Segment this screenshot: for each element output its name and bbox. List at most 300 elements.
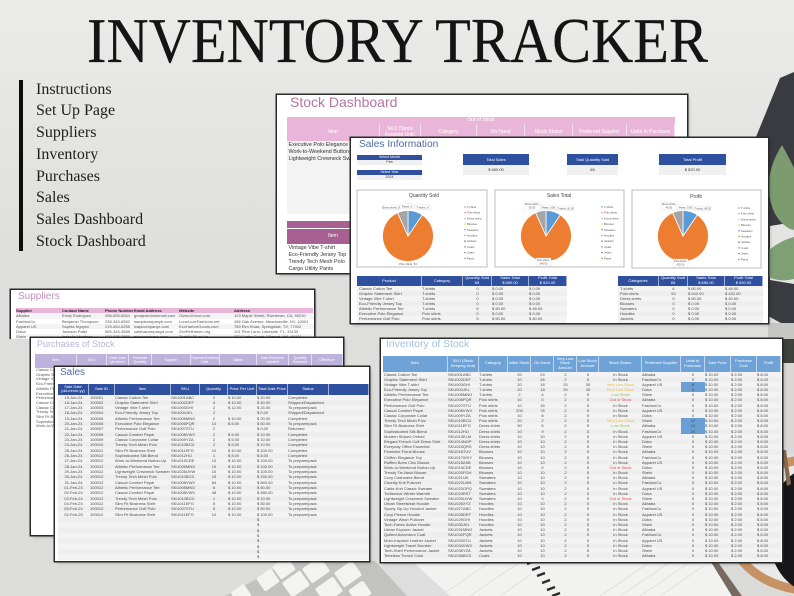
suppliers table: 456 Oak Avenue, Meadowville, NY, 10001 [234,319,308,324]
second table header [287,229,675,244]
inventory table rows: SKU016TUV [448,449,471,454]
kpi: total sales: Total Sales [486,157,506,162]
categories table rows: Polo shirts [620,291,639,296]
sales table rows: 2 [213,394,215,400]
sales table rows: $ 10.00 [257,442,270,447]
inventory table rows: $ 10.00 [705,413,718,418]
sales table header: SKU [181,386,189,391]
purchases table rows: Performance Golf [36,395,67,400]
inventory table rows: Apparel US [642,408,662,413]
sales table rows: Returned [288,426,304,431]
inventory table rows: In Stock [613,429,628,434]
inventory table rows: SKU001ABC [448,372,471,376]
inventory table rows: 5 [587,449,589,454]
inventory table rows: $ 10.00 [705,496,718,501]
inventory table rows: Apparel US [642,460,662,465]
sales table rows: To prepare/pack [288,490,317,495]
inventory table rows: 2 [564,501,567,506]
product table rows: Polo shirts [422,316,441,321]
sales table rows: 10 [212,469,216,474]
inventory table rows: 5 [587,413,589,418]
categories table rows: Hoodies [620,311,635,316]
categories table rows: 0 [672,311,675,316]
inventory table rows: Classic Cotton Tee [384,372,417,376]
chart: quantity sold: Dress shirts [467,216,482,220]
inventory table rows: $ 8.00 [757,423,768,428]
inventory table rows: 5 [587,512,589,517]
inventory table rows: Urban Streetwear Hoodie [384,501,429,506]
sales table rows: Slim Fit Business Shirt [115,512,155,517]
purchases table header: Difference [319,358,335,362]
sales table rows: 1 [213,453,215,458]
inventory table rows: 10 [517,397,522,402]
sales table rows: Completed [288,432,307,437]
inventory table rows: $ 10.00 [705,548,718,553]
inventory table rows: 5 [587,434,589,439]
sales table rows: 100012 [90,485,103,490]
inventory table rows: Timeless Trench Coat [384,553,423,558]
inventory table rows: SKU002DEF [448,377,471,382]
categories table rows: $ 0.00 [688,301,699,306]
chart: sales total: Hoodies [604,234,615,238]
inventory table rows: 10 [517,460,522,465]
product table rows: T-shirts [422,301,435,306]
categories table header: $ 520.00 [736,280,751,285]
chart: sales total: Blouses [604,222,615,226]
inventory table rows: 0 [541,397,544,402]
inventory table rows: Alibaba [642,475,655,480]
chart: profit: Pants, 0.00 [679,205,693,209]
inventory table rows: Shein [642,522,652,527]
chart: quantity sold: T-shirts [467,205,477,209]
sales table rows: 23-Jan-24 [64,437,82,442]
inventory table rows: 2 [564,548,567,553]
inventory table rows: SKU009YZA [448,413,471,418]
sales table header: Sale ID [95,386,108,391]
inventory table rows: T-shirts [479,392,492,397]
inventory table rows: Performance Golf Polo [384,403,424,408]
inventory table rows: $ 10.00 [705,517,718,522]
inventory table header: SKU (Stock Keeping Unit) [451,358,475,368]
panel: inventory of stock [381,339,782,562]
categories table rows: Sweaters [620,306,637,311]
kpi: total sales: $ 650.00 [488,167,504,172]
purchases table header: Status [233,358,243,362]
sales table rows: To prepare/pack [288,480,317,485]
inventory table rows: 0 [692,408,694,413]
sales table rows: SKU002DEF [171,400,194,405]
product table header: Category [434,278,450,283]
inventory table rows: In Stock [613,486,628,491]
inventory table rows: Very Low Stock [607,418,634,423]
sales table rows: To prepare/pack [288,458,317,463]
sales table rows: To prepare/pack [288,421,317,426]
inventory table rows: $ 2.00 [731,377,742,382]
inventory table rows: $ 8.00 [757,429,768,434]
inventory table rows: 5 [587,517,589,522]
sales table rows: SKU011EFG [171,512,194,517]
inventory table rows: FashionCo [642,532,661,537]
inventory table rows: Hoodies [479,501,494,506]
sales table rows: 100001 [90,394,103,400]
inventory table rows: 5 [587,372,589,376]
sales table rows: Executive Polo Elegance [115,421,159,426]
inventory table rows: $ 10.00 [705,429,718,434]
categories table rows: $ 0.00 [725,301,736,306]
purchases table rows: Classic Corporate [36,405,68,410]
inventory table rows: SKU021IJK [448,475,469,480]
sales table rows: $ 100.00 [257,512,273,517]
inventory table rows: 0 [692,532,694,537]
inventory table header: Sale Price [708,360,727,365]
inventory table rows: 30 [586,382,590,387]
sales table rows: 100012 [90,458,103,463]
inventory table rows: Out of Stock [609,397,632,402]
chart: profit: T-shirts, 48.00 [694,206,711,210]
inventory table rows: Out of Stock [609,496,632,501]
chart: quantity sold: Polo shirts, 54 [399,262,417,266]
categories table rows: 0 [672,316,675,321]
inventory table rows: Polo shirts [479,413,498,418]
out of stock table header [287,124,675,141]
inventory table rows: $ 10.00 [705,439,718,444]
sales table rows: Athletic Performance Tee [115,485,160,490]
inventory table rows: 10 [540,501,545,506]
inventory table rows: 0 [692,527,694,532]
inventory table rows: $ 8.00 [757,532,768,537]
inventory table rows: In Stock [613,501,628,506]
inventory table rows: Hoodies [479,517,494,522]
inventory table rows: 20 [563,387,568,392]
inventory table rows: Modern Striped Oxford [384,434,424,439]
sales table rows: $ 20.00 [257,416,270,421]
inventory table rows: 5 [587,377,589,382]
inventory table rows: Cozy Cashmere Blend [384,475,424,480]
inventory table rows: SKU014NOP [448,439,472,444]
chart: profit [632,190,761,268]
inventory table rows: In Stock [613,553,628,558]
inventory table rows: 20 [691,429,695,434]
inventory table rows: SKU015QRS [448,444,472,449]
inventory table rows: 10 [517,480,522,485]
sales table rows: $ 0.00 [257,410,268,415]
inventory table rows: 2 [564,423,567,428]
product table rows: 0 [476,291,479,296]
inventory table header: Initial Stock [509,360,529,365]
inventory table rows: $ 8.00 [757,434,768,439]
sales table rows: SKU005MNO [171,464,195,469]
inventory table rows: 5 [587,408,589,413]
inventory table rows: In Stock [613,522,628,527]
inventory table rows: 10 [517,496,522,501]
inventory table rows: Executive Polo Elegance [384,397,428,402]
inventory table rows: 10 [517,543,522,548]
suppliers table: 215-454-5255 [105,324,130,329]
kpi: total quantity sold [567,154,618,175]
inventory table rows: Polo shirts [479,397,498,402]
suppliers table: 101 Pine Lane, Lakeside, FL, 33139 [234,329,298,334]
sales table rows: $ [257,544,259,549]
inventory table rows: $ 2.00 [731,480,742,485]
inventory table rows: 0 [692,543,694,548]
inventory table rows: 2 [564,434,567,439]
inventory table rows: 2 [564,413,567,418]
inventory table rows: SKU017WXY [448,454,472,460]
inventory table rows: 0 [541,465,544,470]
sales table rows: SKU010BCD [171,496,194,501]
inventory table rows: 5 [587,522,589,527]
inventory table rows: 0 [692,460,694,465]
product table rows: Graphic Statement Shirt [359,291,402,296]
categories table rows: $ 0.00 [725,306,736,311]
inventory table rows: In Stock [613,475,628,480]
inventory table rows: $ 2.00 [731,470,742,475]
product table rows [357,286,567,323]
inventory table rows: $ 2.00 [731,496,742,501]
sales table rows: 48 [212,490,216,495]
sales table rows: Performance Golf Polo [115,426,155,431]
sales table rows: $ 10.00 [228,490,241,495]
sales table rows: Casual Comfort Piqué [115,490,154,495]
inventory table rows: FashionCo [642,429,661,434]
inventory table rows: 10 [517,486,522,491]
sales table rows: SKU025UVW [171,469,195,474]
inventory table rows: 26 [540,377,545,382]
purchases table header: Quantity Received [293,356,307,364]
inventory table header: Profit [764,360,773,365]
suppliers table: Contact Name [62,308,89,313]
inventory table rows: $ 2.00 [731,506,742,511]
purchases table rows: Graphic Statement [36,372,69,377]
chart: sales total: Polo shirts [604,211,618,215]
inventory table rows: 2 [564,475,567,480]
inventory table rows: Sweaters [479,486,496,491]
sales table rows: 16-Jan-24 [64,400,82,405]
inventory table rows: 5 [587,491,589,496]
inventory table rows: Jackets [479,543,493,548]
inventory table rows: 10 [517,501,522,506]
inventory table rows: 5 [541,423,544,428]
sales table rows: SKU011EFG [171,448,194,453]
inventory table rows: $ 2.00 [731,501,742,506]
inventory table rows: $ 8.00 [757,439,768,444]
inventory table rows: Polo shirts [479,403,498,408]
heading: suppliers: Suppliers [18,291,60,302]
inventory table rows: SKU022LMN [448,480,471,485]
inventory table rows: $ 8.00 [757,470,768,475]
sales table rows: Slim Fit Business Shirt [115,501,155,506]
sales table rows: 100010 [90,442,103,447]
inventory table rows: 0 [541,496,544,501]
inventory table rows: Blouses [479,470,493,475]
inventory table rows: 10 [540,486,545,491]
inventory table rows: $ 8.00 [757,475,768,480]
inventory table header: Very Low Stock Amount [557,356,573,370]
inventory table rows: $ 2.00 [731,460,742,465]
suppliers table: 235-345-6552 [105,319,130,324]
inventory table rows: $ 8.00 [757,372,768,376]
inventory table rows: Feminine Floral Blouse [384,449,425,454]
sales table rows: Completed [288,416,307,421]
sales table rows: Classic Corporate Collar [115,437,158,442]
inventory table rows: 0 [692,444,694,449]
inventory table rows: Alibaba [642,423,655,428]
inventory table rows: $ 2.00 [731,486,742,491]
sales table rows: $ 5.00 [228,421,239,426]
inventory table rows: 10 [540,449,545,454]
suppliers table: Sophia Nguyen [62,324,89,329]
sales table rows: 10 [212,448,216,453]
purchases table rows: Slim Fit Business [36,414,67,419]
heading: purchases of stock: Purchases of Stock [37,339,115,349]
sales table rows: 2 [213,437,215,442]
inventory table rows: $ 10.00 [705,403,718,408]
inventory table rows: SKU031MNO [448,527,472,532]
inventory table rows: $ 10.00 [705,449,718,454]
sales table rows: SKU007STU [171,426,194,431]
sales table rows: 15-Jan-24 [64,394,82,400]
sales table rows: Completed [288,453,307,458]
inventory table rows: $ 10.00 [705,501,718,506]
suppliers table: ZenPetHaven.org [179,329,210,334]
inventory table rows: 0 [692,486,694,491]
inventory table rows: 10 [517,548,522,553]
inventory table rows: SKU008VWX [448,408,472,413]
categories table rows: 6 [672,286,675,291]
sales table rows: Graphic Statement Shirt [115,400,158,405]
inventory table rows: 10 [540,460,545,465]
suppliers table: 096-555-5654 [105,313,130,318]
sales table rows: Athletic Performance Tee [115,464,160,469]
product table rows: $ 0.00 [492,286,503,291]
inventory table rows: 20 [517,387,522,392]
inventory table rows: $ 8.00 [757,512,768,517]
inventory table rows: $ 8.00 [757,408,768,413]
inventory table rows: $ 8.00 [757,543,768,548]
chart: profit: Dress shirts [741,217,756,221]
inventory table rows: In Stock [613,527,628,532]
product table rows: $ 0.00 [492,311,503,316]
inventory table rows: Doba [642,491,652,496]
inventory table rows: 0 [692,470,694,475]
sales table rows: SKU011EFG [171,501,194,506]
sales table rows: 100008 [90,432,103,437]
inventory table rows: SKU025UVW [448,496,472,501]
inventory table rows: $ 10.00 [705,465,718,470]
sales table rows: 100012 [90,501,103,506]
categories table rows: $ 60.00 [688,286,701,291]
categories table rows: 0 [672,306,675,311]
inventory table rows: Tech-Shell Performance Jacket [384,548,439,553]
product table rows: $ 50.00 [492,316,505,321]
inventory table rows: In Stock [613,372,628,376]
chart: profit: Polo shirts, [674,259,687,263]
inventory table rows: 5 [587,486,589,491]
inventory table rows: 10 [517,449,522,454]
inventory table rows: 2 [564,392,567,397]
inventory table rows: Apparel US [642,538,662,542]
kpi: total sales [463,154,529,175]
out of stock table header: Preferred Supplier [579,129,620,135]
inventory table rows: 10 [517,429,522,434]
inventory table rows: $ 2.00 [731,548,742,553]
chart: quantity sold: Sweaters [467,228,479,232]
inventory table rows: Low Stock [611,392,630,397]
inventory table rows: 76 [540,408,545,413]
sales table rows: To prepare/pack [288,512,317,517]
inventory table rows: $ 2.00 [731,553,742,558]
inventory table rows: SKU013KLM [448,434,471,439]
inventory table rows: 9 [692,387,694,392]
chart: quantity sold: Blouses [467,222,478,226]
heading: sales: Sales [60,367,85,378]
sales table rows: Lightweight Crewneck Sweater [115,469,170,474]
sales table rows: Work-to-Weekend Button-Up [115,458,166,463]
inventory table rows: 2 [564,527,567,532]
sales table rows: 10 [212,512,216,517]
inventory table rows: 0 [692,553,694,558]
sales table rows: Completed [288,437,307,442]
sales table header: Price Per Unit [230,386,254,391]
chart: sales total [495,190,624,267]
sales table rows: 21-Jan-24 [64,426,82,431]
sales table rows: 02-Feb-25 [64,512,83,517]
inventory table rows: $ 2.00 [731,413,742,418]
inventory table rows: 2 [564,429,567,434]
select year: 2024 [386,175,394,179]
suppliers table: 123 Maple Street, Rivertown, CA, 90210 [234,313,306,318]
inventory table rows: 10 [540,553,545,558]
inventory table rows: Blouses [479,449,493,454]
out of stock banner [287,117,675,124]
sales table rows: 100002 [90,400,103,405]
categories table rows: Dress shirts [620,296,641,301]
inventory table rows: Doba [642,387,652,392]
inventory table rows: In Stock [613,434,628,439]
inventory table rows: Tech-Fabric Active Hoodie [384,522,430,527]
sales table rows: 28-Jan-24 [64,464,82,469]
sales table rows: Trendy Tech Mesh Polo [115,442,157,447]
sales table rows: $ 10.00 [257,437,270,442]
sales table rows: Athletic Performance Tee [115,416,160,421]
chart: quantity sold: T-shirts, 6 [416,205,429,209]
chart: profit: Jeans [741,252,749,256]
sales table rows: 18-Jan-24 [64,410,82,415]
out of stock rows [287,141,675,214]
inventory table rows: 5 [587,480,589,485]
inventory table rows: $ 8.00 [757,491,768,496]
product table rows: T-shirts [422,296,435,301]
inventory table rows: $ 2.00 [731,465,742,470]
contents list: Suppliers [36,124,96,141]
categories table rows: 5 [672,296,675,301]
inventory table rows: 10 [540,470,545,475]
inventory table rows: Cozy Fleece Hoodie [384,512,420,517]
suppliers table: 789 Elm Road, Springdale, TX, 77002 [234,324,301,329]
purchases table rows [36,367,80,428]
inventory table rows: 18 [540,382,545,387]
suppliers table: LuneLuxeFashions.net [179,319,219,324]
kpi: total quantity sold: Total Quantity Sold [576,157,609,162]
inventory table rows: $ 2.00 [731,527,742,532]
inventory table rows: Apparel US [642,512,662,517]
sales table rows: 10 [212,458,216,463]
inventory table rows: In Stock [613,470,628,475]
sales table rows: SKU006PQR [171,421,195,426]
contents list: Stock Dashboard [36,233,146,250]
product table rows: 0 [476,286,479,291]
inventory table rows: $ 2.00 [731,532,742,537]
